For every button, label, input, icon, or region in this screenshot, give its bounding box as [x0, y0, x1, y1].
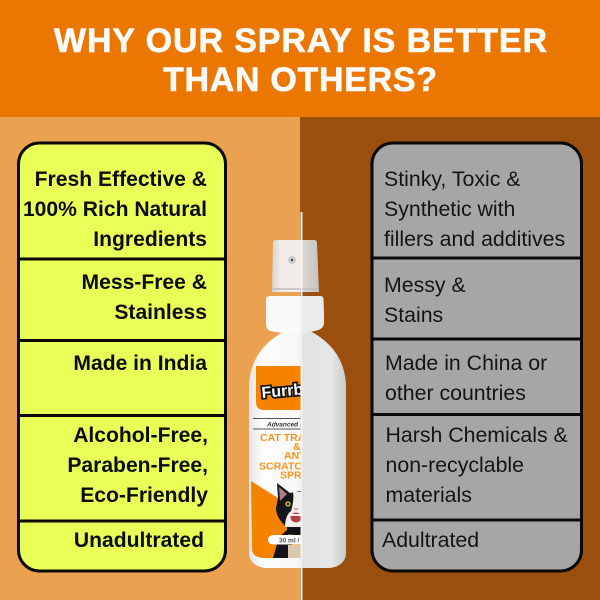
bottle body — [249, 331, 346, 568]
drawback: harsh chemicals: non-recyclable — [386, 453, 524, 477]
header banner — [0, 0, 600, 117]
drawback: messy: Messy & — [384, 273, 466, 297]
drawback: harsh chemicals — [386, 423, 568, 507]
benefit: alcohol-free: Paraben-Free, — [67, 454, 208, 477]
panel: our spray benefits — [18, 143, 226, 571]
label size text: 30 ml / — [279, 538, 299, 544]
drawback: adultrated: Adultrated — [382, 528, 479, 552]
benefit: natural ingredients: 100% Rich Natural — [23, 198, 207, 221]
drawback: toxic: Stinky, Toxic & — [384, 167, 521, 191]
drawback: harsh chemicals: Harsh Chemicals & — [386, 423, 568, 447]
drawback: made elsewhere: Made in China or — [385, 351, 547, 375]
benefit: unadultrated: Unadultrated — [74, 529, 204, 552]
label product name: SCRATCH — [259, 460, 310, 472]
label product name: & — [293, 441, 301, 453]
cat — [273, 483, 302, 558]
bottle collar — [266, 296, 324, 333]
benefit: natural ingredients — [23, 168, 207, 251]
benefit: natural ingredients: Ingredients — [93, 228, 207, 251]
benefit: mess-free: Mess-Free & — [82, 271, 207, 294]
drawback: made elsewhere: other countries — [385, 381, 526, 405]
title: THAN OTHERS? — [163, 61, 437, 99]
panel: other sprays drawbacks — [372, 143, 582, 571]
title — [54, 22, 547, 99]
label product name: ANTI — [284, 450, 309, 462]
center divider line — [300, 212, 302, 600]
benefit: mess-free: Stainless — [114, 301, 207, 324]
benefit: alcohol-free — [67, 424, 208, 507]
label product name: SPRAY — [280, 470, 315, 482]
label stripes — [253, 418, 301, 429]
right background panel — [300, 117, 600, 600]
title: WHY OUR SPRAY IS BETTER — [54, 22, 547, 60]
drawback: made elsewhere — [385, 351, 547, 405]
brand name: Furrb — [261, 381, 304, 402]
left background panel — [0, 117, 300, 600]
benefit: natural ingredients: Fresh Effective & — [35, 168, 207, 191]
benefit: mess-free — [82, 271, 207, 324]
label size pill — [268, 535, 300, 544]
benefit: made in India: Made in India — [73, 352, 207, 375]
drawback: harsh chemicals: materials — [386, 483, 472, 507]
drawback: messy — [384, 273, 466, 327]
bottle illustration — [249, 240, 346, 568]
benefit: alcohol-free: Alcohol-Free, — [73, 424, 208, 447]
drawback: toxic — [384, 167, 565, 251]
label orange wedge — [251, 481, 301, 558]
drawback: messy: Stains — [384, 303, 443, 327]
spray nozzle cap — [272, 240, 319, 292]
label tagline: Advanced F — [266, 422, 305, 428]
drawback: toxic: fillers and additives — [384, 227, 565, 251]
label product name — [259, 434, 300, 478]
benefit: alcohol-free: Eco-Friendly — [80, 484, 208, 507]
label brand block — [256, 366, 301, 410]
product label — [251, 366, 300, 558]
drawback: toxic: Synthetic with — [384, 197, 515, 221]
label product name: CAT TRAP — [260, 432, 312, 444]
